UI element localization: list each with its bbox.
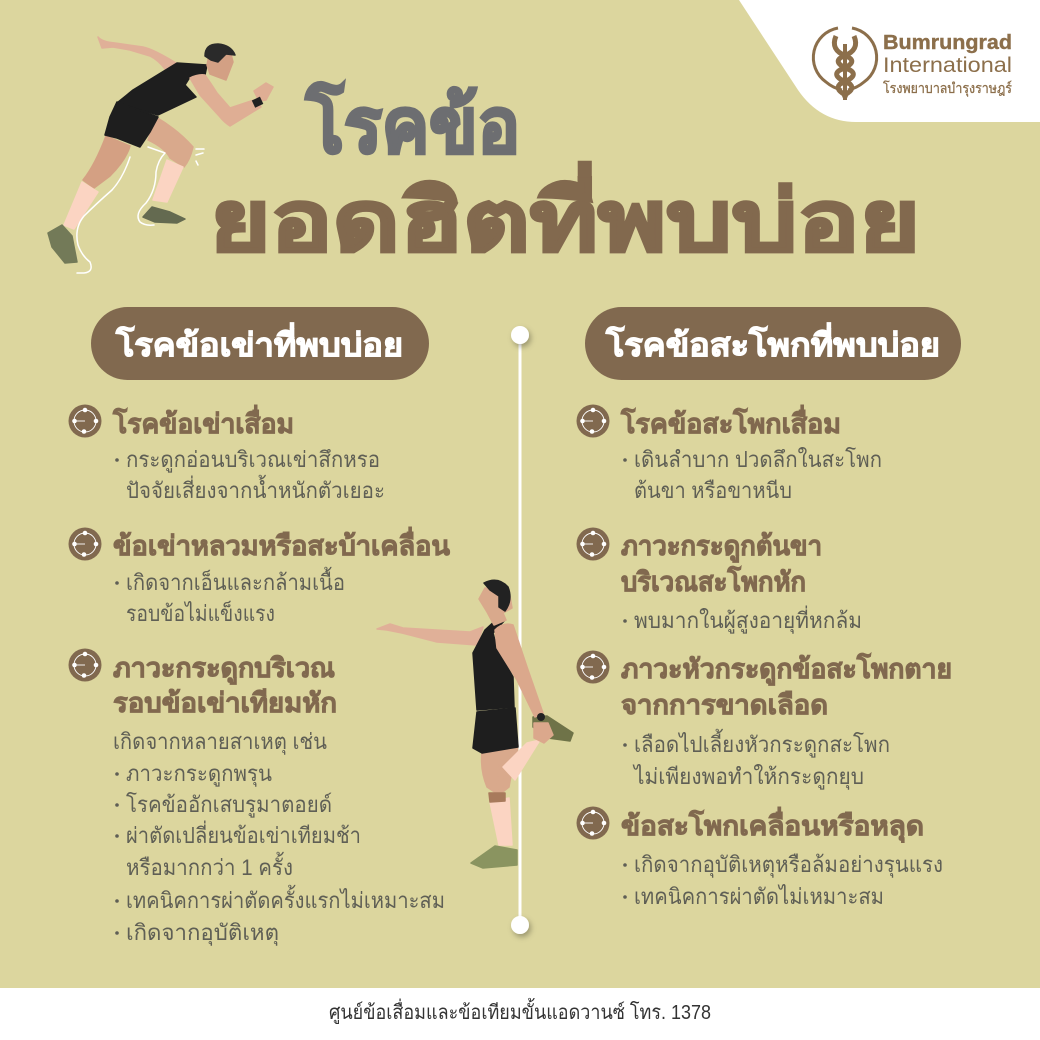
item: hip dislocation: เกิดจากอุบัติเหตุหรือล้มอย่างรุนแรง [634, 852, 943, 878]
heading pill: hip: โรคข้อสะโพกที่พบบ่อย [605, 322, 940, 363]
shorts [105, 102, 158, 147]
item: loose knee: เกิดจากเอ็นและกล้ามเนื้อ [126, 567, 345, 595]
shorts [473, 708, 518, 753]
rear arm [98, 37, 176, 69]
footer: ศูนย์ข้อเสื่อมและข้อเทียมขั้นแอดวานซ์ โทร. 1378 [329, 998, 711, 1025]
neck and face [207, 50, 233, 80]
item: hip osteoarthritis [576, 404, 882, 503]
white leg outlines [77, 147, 204, 273]
hand [534, 723, 553, 743]
standing shoe [471, 846, 517, 868]
footer [0, 988, 1040, 1040]
front arm [190, 75, 261, 126]
logo wordmark: International [883, 54, 1012, 77]
item: hip osteoarthritis: โรคข้อสะโพกเสื่อม [620, 404, 841, 439]
item: hip fracture [576, 528, 862, 634]
item: loose knee: ข้อเข่าหลวมหรือสะบ้าเคลื่อน [113, 526, 451, 561]
item: periprosthetic fracture: เกิดจากหลายสาเหตุ เช่น [113, 729, 327, 755]
item: periprosthetic fracture: รอบข้อเข่าเทียมหัก [113, 688, 337, 718]
item: avascular necrosis: จากการขาดเลือด [621, 690, 828, 720]
lifted shoe [533, 716, 573, 741]
item: hip dislocation: ข้อสะโพกเคลื่อนหรือหลุด [621, 806, 924, 843]
item: avascular necrosis [576, 650, 952, 790]
logo panel [739, 0, 1040, 122]
hair [484, 580, 510, 611]
rear sock [64, 182, 98, 229]
front sock [153, 160, 183, 202]
item: hip dislocation [576, 806, 943, 909]
item: avascular necrosis: ภาวะหัวกระดูกข้อสะโพกตาย [621, 652, 952, 686]
front shoe [143, 207, 185, 223]
panel: knee conditions [68, 307, 451, 946]
front thigh [148, 117, 193, 167]
heading pill: hip [585, 307, 961, 380]
item: periprosthetic fracture: หรือมากกว่า 1 ครั้ง [126, 852, 293, 880]
panel: hip conditions [576, 307, 961, 909]
item: knee osteoarthritis: กระดูกอ่อนบริเวณเข่าสึกหรอ [126, 447, 380, 473]
rear shoe [48, 225, 77, 263]
figure: stretching man [377, 580, 573, 868]
item: hip fracture: ภาวะกระดูกต้นขา [621, 531, 822, 563]
item: periprosthetic fracture: เกิดจากอุบัติเหตุ [126, 920, 279, 946]
item: periprosthetic fracture: ผ่าตัดเปลี่ยนข้อเข่าเทียมช้า [126, 820, 361, 848]
item: loose knee: รอบข้อไม่แข็งแรง [126, 599, 275, 626]
rear thigh [83, 136, 130, 188]
item: loose knee [68, 526, 451, 626]
title line 2: ยอดฮิตที่พบบ่อย [210, 162, 920, 268]
center timeline [511, 326, 529, 934]
knee [489, 793, 505, 802]
item: periprosthetic fracture: ภาวะกระดูกพรุน [126, 761, 272, 787]
item: hip osteoarthritis: ต้นขา หรือขาหนีบ [634, 478, 792, 503]
item: knee osteoarthritis [68, 404, 385, 503]
watch [252, 97, 263, 108]
hand [254, 83, 273, 101]
logo wordmark: โรงพยาบาลบำรุงราษฎร์ [883, 80, 1012, 97]
figure: runner [48, 37, 273, 273]
logo wordmark: Bumrungrad [883, 32, 1012, 54]
item: avascular necrosis: ไม่เพียงพอทำให้กระดูกยุบ [632, 764, 864, 790]
item: periprosthetic fracture: โรคข้ออักเสบรูมาตอยด์ [126, 792, 332, 818]
item: hip fracture: บริเวณสะโพกหัก [621, 565, 806, 597]
lower sock [490, 798, 512, 845]
heading pill: knee: โรคข้อเข่าที่พบบ่อย [115, 322, 403, 363]
heading pill: knee [91, 307, 429, 380]
item: periprosthetic fracture [68, 648, 445, 946]
item: periprosthetic fracture: ภาวะกระดูกบริเวณ [113, 653, 335, 685]
item: hip fracture: พบมากในผู้สูงอายุที่หกล้ม [634, 605, 862, 634]
logo wordmark [883, 32, 1012, 97]
bent thigh [497, 745, 518, 792]
torso [473, 618, 514, 710]
hair [205, 44, 235, 62]
item: hip osteoarthritis: เดินลำบาก ปวดลึกในสะโพก [634, 447, 882, 472]
item: avascular necrosis: เลือดไปเลี้ยงหัวกระดูกสะโพก [634, 729, 890, 758]
bent sock [503, 740, 540, 780]
rear arm [495, 624, 543, 717]
item: knee osteoarthritis: โรคข้อเข่าเสื่อม [112, 404, 294, 439]
item: knee osteoarthritis: ปัจจัยเสี่ยงจากน้ำหนักตัวเยอะ [126, 475, 385, 503]
watch [537, 713, 545, 721]
standing leg [482, 748, 512, 795]
item: periprosthetic fracture: เทคนิคการผ่าตัดครั้งแรกไม่เหมาะสม [126, 885, 445, 913]
icon: Bumrungrad caduceus [813, 28, 877, 100]
head [479, 588, 512, 625]
title line 1: โรคข้อ [305, 81, 520, 169]
item: hip dislocation: เทคนิคการผ่าตัดไม่เหมาะสม [634, 884, 884, 909]
torso [117, 63, 207, 115]
extended arm [377, 624, 483, 645]
